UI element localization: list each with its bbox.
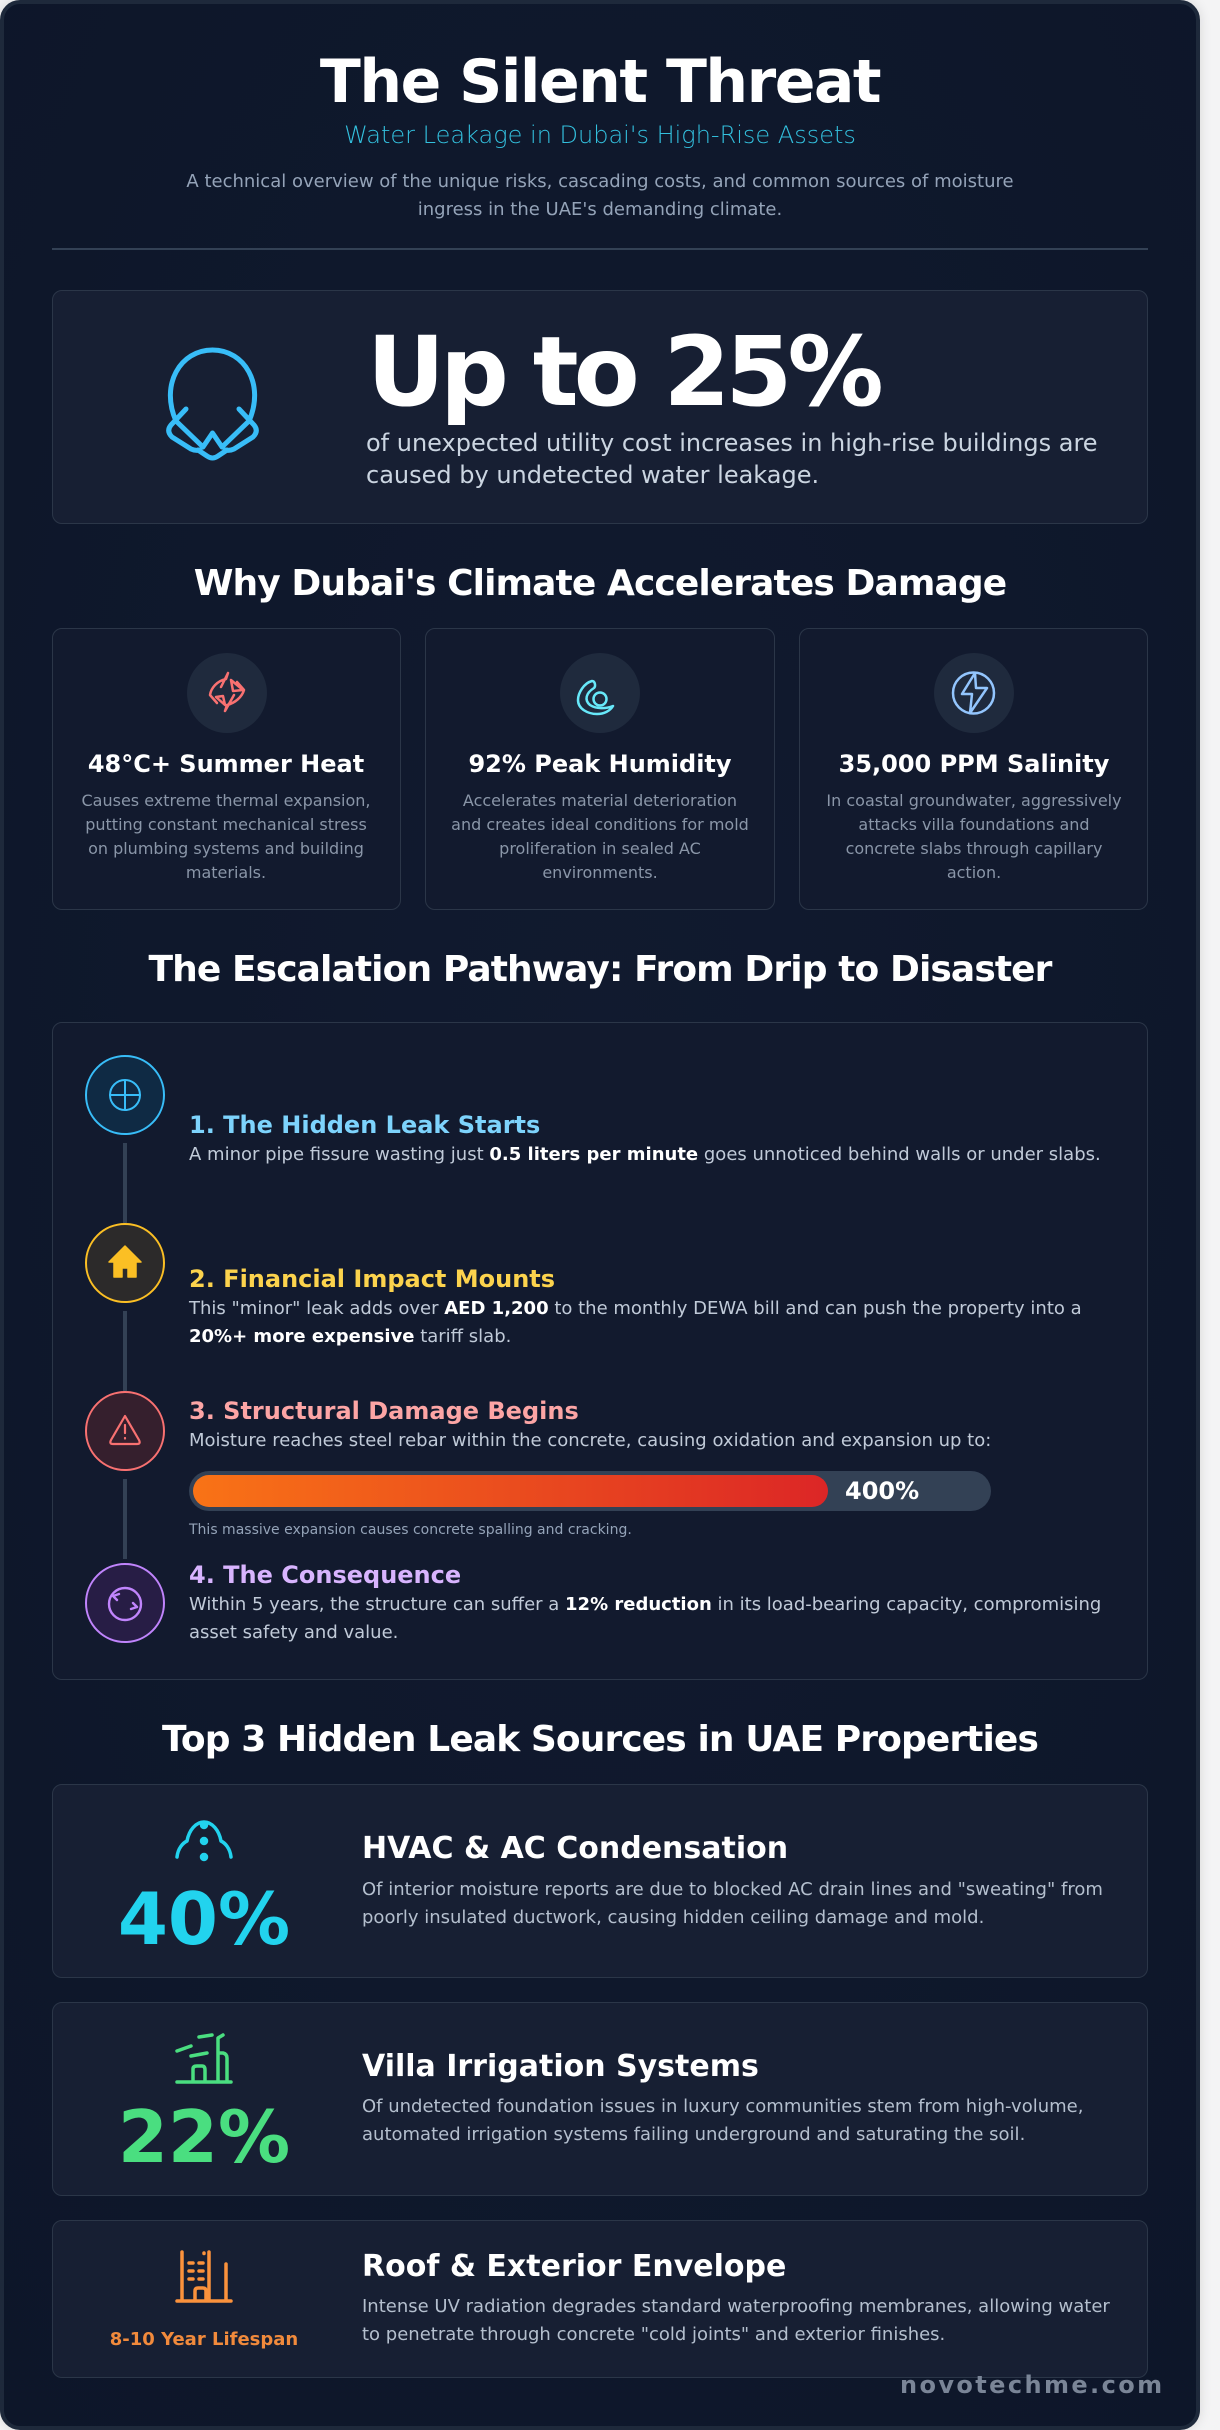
bar value: 400% [845,1477,919,1505]
step 4 text [189,1594,1101,1643]
source text: HVAC [362,1879,1103,1928]
card text: heat: on plumbing systems and building [88,839,364,858]
progress bar [189,1471,991,1511]
intro text: A technical overview of the unique risks, cascading costs, and common sources of moisture [186,171,1014,192]
step 2 text: 20%+ more expensive tariff slab. [189,1326,511,1347]
source text: HVAC: poorly insulated ductwork, causing hidden ceiling damage and mold. [362,1907,984,1928]
source text: irrigation: automated irrigation systems failing underground and saturating the soil. [362,2124,1025,2145]
step 4 text: asset safety and value. [189,1622,398,1643]
intro text [186,171,1014,220]
step 1 title: 1. The Hidden Leak Starts [189,1111,540,1139]
card text: salinity [826,791,1122,882]
step 3 text: Moisture reaches steel rebar within the concrete, causing oxidation and expansion up to: [189,1430,991,1451]
heading: pathway: The Escalation Pathway: From Drip to Disaster [148,949,1052,990]
connector 3 [123,1479,127,1559]
connector 1 [123,1143,127,1223]
icon: salinity [934,653,1014,733]
icon: irrigation [175,2033,233,2084]
bar fill [193,1475,828,1507]
source text: irrigation: Of undetected foundation issues in luxury communities stem from high-volume, [362,2096,1083,2117]
connector 2 [123,1311,127,1391]
source text: irrigation [362,2096,1083,2145]
header [186,47,1014,220]
icon: leak drop [166,348,259,460]
hero text: caused by undetected water leakage. [366,461,819,489]
step 3 title: 3. Structural Damage Begins [189,1397,579,1425]
intro text: ingress in the UAE's demanding climate. [418,199,782,220]
card text: humidity [451,791,749,882]
step 4 title: 4. The Consequence [189,1561,461,1589]
panel: salinity [799,628,1148,910]
step 2 text: This "minor" leak adds over AED 1,200 to the monthly DEWA bill and can push the property into a [189,1298,1082,1319]
icon: HVAC [175,1820,233,1862]
step 2 text [188,1298,1082,1347]
source text: roof: to penetrate through concrete "cold joints" and exterior finishes. [362,2324,945,2345]
heading: climate: Why Dubai's Climate Accelerates Damage [194,563,1006,604]
icon: step 2 [85,1223,165,1303]
card text: humidity: Accelerates material deterioration [463,791,737,810]
card text: salinity: In coastal groundwater, aggressively [826,791,1122,810]
panel: humidity [425,628,775,910]
card title: heat: 48°C+ Summer Heat [88,750,364,778]
card text: humidity: environments. [542,863,658,882]
bar note: This massive expansion causes concrete spalling and cracking. [189,1522,632,1538]
heading: sources: Top 3 Hidden Leak Sources in UAE Properties [162,1719,1038,1760]
card text: salinity: concrete slabs through capillary [846,839,1102,858]
card title: salinity: 35,000 PPM Salinity [839,750,1109,778]
panel: roof [52,2220,1148,2378]
card text: humidity: and creates ideal conditions for mold [451,815,749,834]
stat: 40 percent: 40% [118,1877,290,1961]
card text: salinity: action. [947,863,1001,882]
card text: heat: putting constant mechanical stress [85,815,367,834]
subtitle: Water Leakage in Dubai's High-Rise Assets [344,121,856,149]
card text: heat [81,791,370,882]
icon: step 4 [85,1563,165,1643]
icon: roof [175,2250,233,2303]
stat: 22 percent: 22% [118,2095,290,2179]
source title: HVAC: HVAC & AC Condensation [362,1831,788,1866]
panel: irrigation [52,2002,1148,2196]
watermark: novotechme.com [900,2371,1164,2399]
card text: salinity: attacks villa foundations and [858,815,1090,834]
step 1 text: A minor pipe fissure wasting just 0.5 liters per minute goes unnoticed behind walls or under slabs. [189,1144,1101,1165]
hero text: of unexpected utility cost increases in high-rise buildings are [366,429,1098,457]
step 4 text: Within 5 years, the structure can suffer a 12% reduction in its load-bearing capacity, compromising [189,1594,1101,1615]
hero text [366,429,1098,489]
source text: roof [362,2296,1110,2345]
icon: heat [187,653,267,733]
icon: step 3 [85,1391,165,1471]
card text: heat: Causes extreme thermal expansion, [81,791,370,810]
source title: roof: Roof & Exterior Envelope [362,2249,786,2284]
card text: heat: materials. [186,863,266,882]
source title: irrigation: Villa Irrigation Systems [362,2049,759,2084]
icon: step 1 [85,1055,165,1135]
step 2 title: 2. Financial Impact Mounts [189,1265,555,1293]
lifespan label: 8-10 Year Lifespan [110,2329,298,2350]
panel: hero stat [52,290,1148,524]
panel: pathway [52,1022,1148,1680]
title: The Silent Threat [320,47,880,117]
panel: HVAC [52,1784,1148,1978]
source text: HVAC: Of interior moisture reports are due to blocked AC drain lines and "sweating" from [362,1879,1103,1900]
icon: humidity [560,653,640,733]
panel: heat [52,628,401,910]
hero number: Up to 25% [367,316,879,428]
source text: roof: Intense UV radiation degrades standard waterproofing membranes, allowing water [362,2296,1110,2317]
card title: humidity: 92% Peak Humidity [468,750,732,778]
card text: humidity: proliferation in sealed AC [499,839,701,858]
